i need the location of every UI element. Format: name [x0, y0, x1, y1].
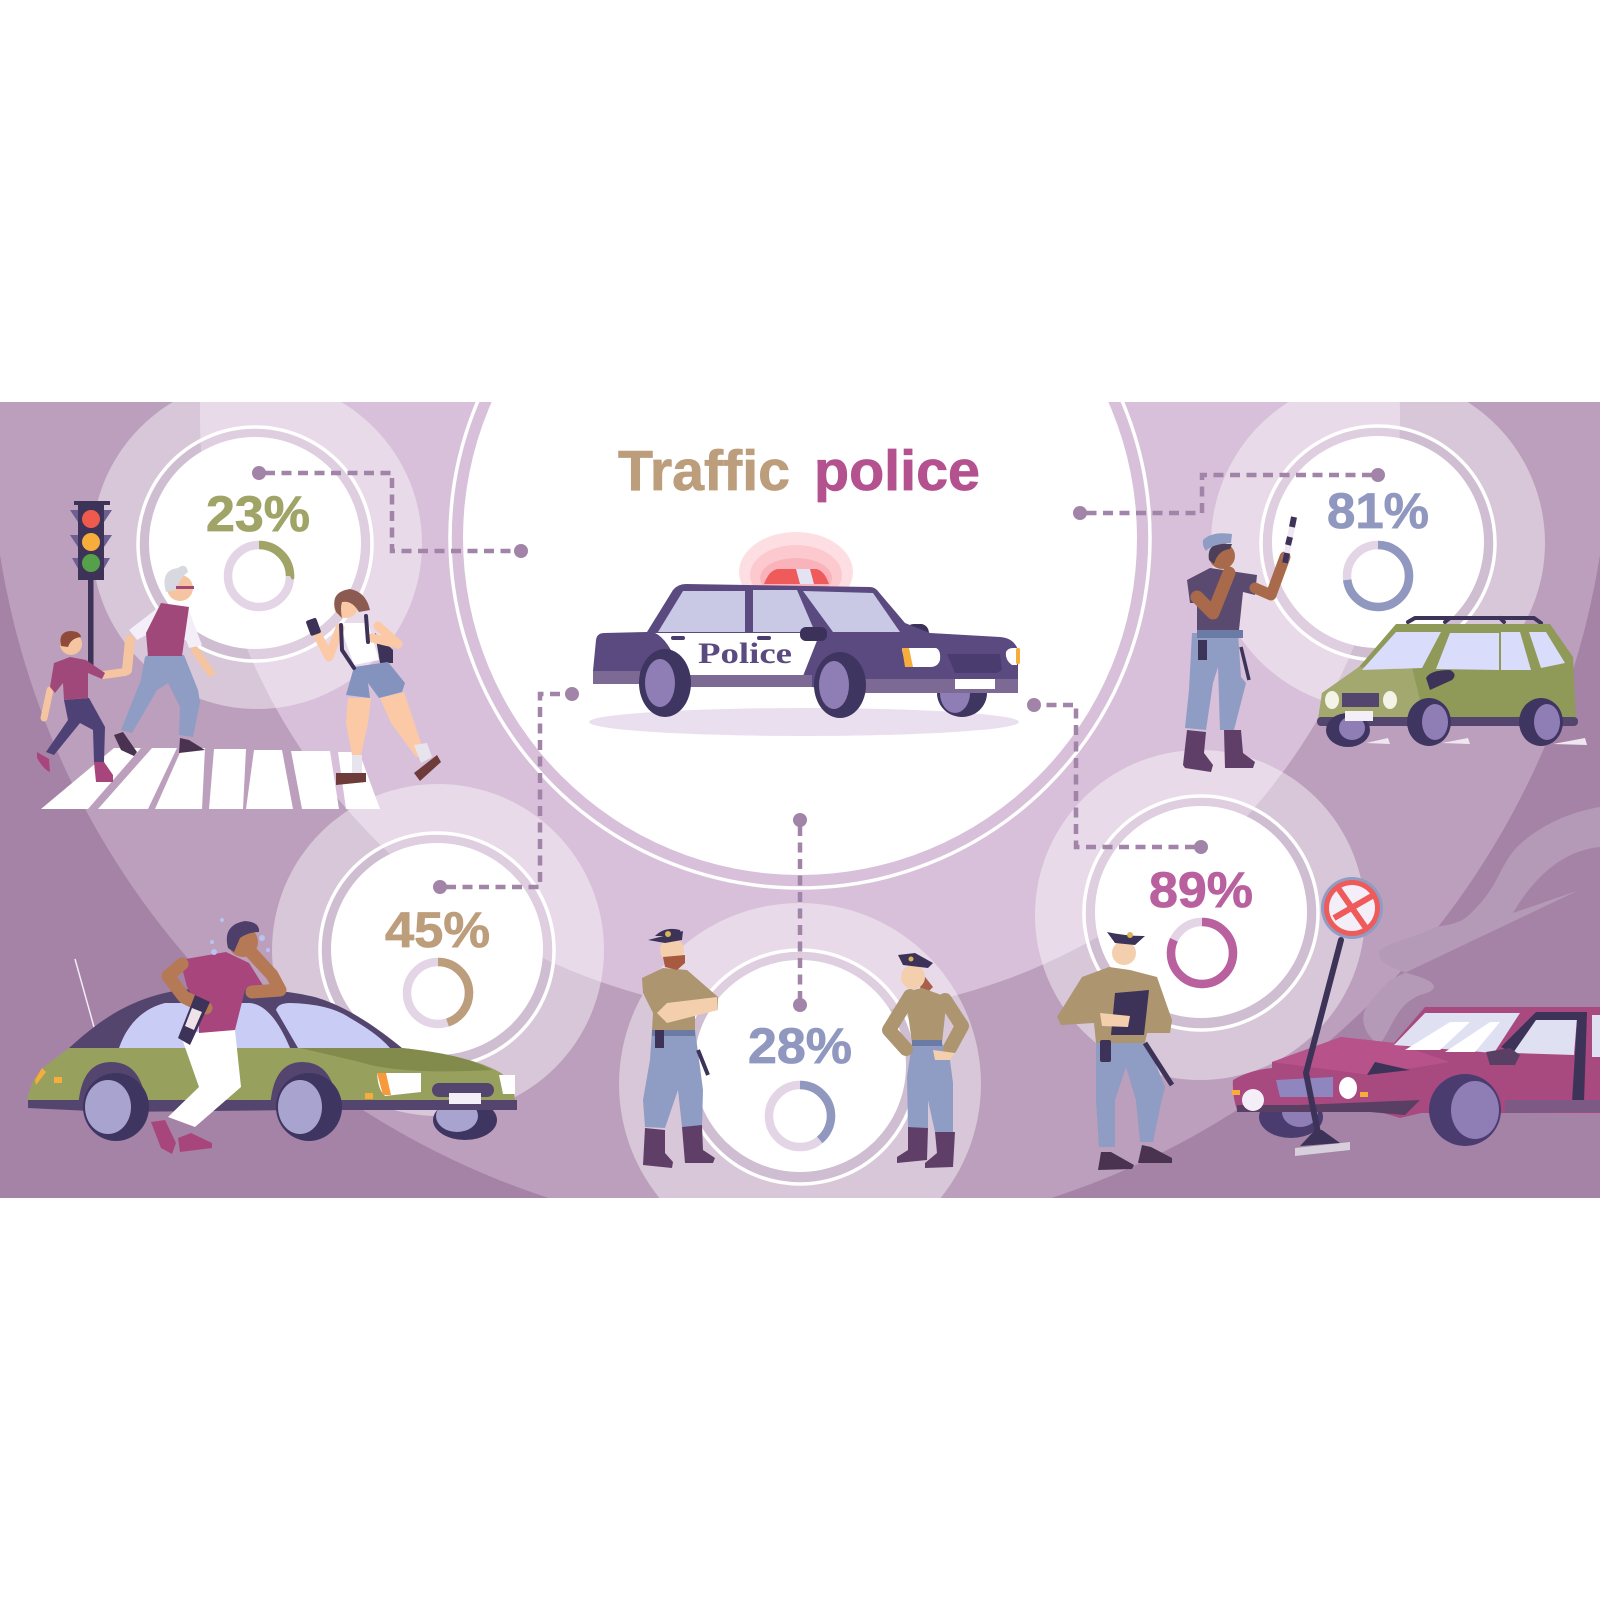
figure: officer with clipboard — [1057, 932, 1172, 1170]
illustration: bent road sign — [1295, 877, 1383, 1156]
connector: 89% to centre — [1027, 698, 1208, 854]
panel: central white circle — [448, 402, 1152, 890]
donut 23% — [228, 545, 290, 607]
illustration: green hatchback — [1317, 618, 1587, 747]
figure: female officer — [889, 953, 962, 1168]
connector: 81% to centre — [1073, 468, 1385, 520]
connector: 45% to centre — [433, 687, 579, 894]
panel: 81% stat circle — [1211, 402, 1545, 700]
illustration: police car: Police — [698, 637, 792, 670]
donut 81% — [1347, 545, 1409, 607]
figure: officer with whistle — [1183, 517, 1294, 772]
title: police — [814, 439, 980, 503]
background band with curved tonal layers — [0, 402, 1600, 1198]
panel: 45% stat circle — [272, 784, 604, 1116]
figure: drunk man with bottle — [151, 918, 280, 1154]
illustration: traffic light — [70, 501, 112, 670]
illustration: green sedan — [27, 959, 517, 1141]
donut 28% — [769, 1085, 831, 1147]
23% value: 23% — [206, 486, 310, 542]
89% value: 89% — [1149, 862, 1253, 918]
donut 45% — [407, 962, 469, 1024]
81% value: 81% — [1327, 483, 1429, 539]
figure: child — [37, 631, 125, 782]
panel: 23% stat circle — [92, 379, 422, 709]
title: Traffic — [618, 439, 790, 503]
title — [618, 439, 980, 503]
donut 89% — [1171, 922, 1233, 984]
panel: 28% stat circle — [619, 903, 981, 1198]
28% value: 28% — [748, 1018, 852, 1074]
45% value: 45% — [385, 902, 490, 958]
illustration: crashed car — [1232, 1007, 1600, 1146]
illustration: police car — [589, 532, 1020, 736]
figure: girl with phone — [306, 589, 441, 785]
figure: bearded officer — [642, 929, 718, 1168]
connector: 23% to centre — [252, 466, 528, 558]
panel: 89% stat circle — [1035, 750, 1365, 1080]
figure: elderly man — [114, 566, 211, 756]
connector: 28% to centre — [793, 813, 807, 1012]
illustration: zebra crossing — [41, 748, 380, 809]
